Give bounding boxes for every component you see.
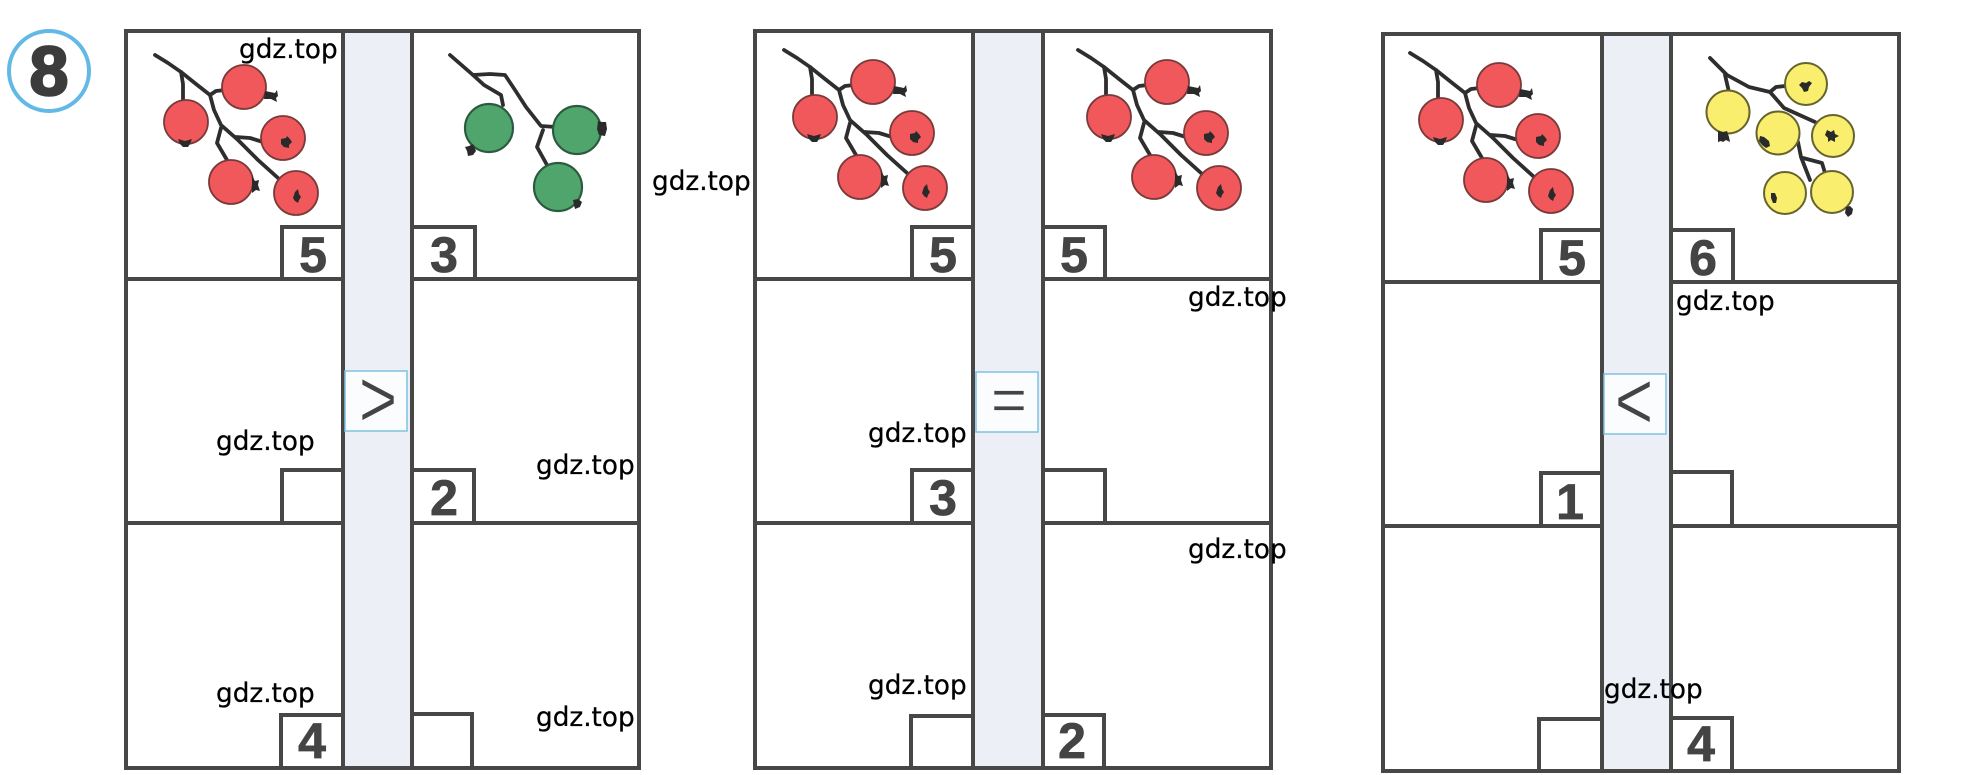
watermarks: gdz.top: gdz.top <box>1188 283 1287 313</box>
watermarks: gdz.top: gdz.top <box>1604 675 1703 705</box>
sign box: greater than <box>345 352 407 445</box>
sign box: greater than: > <box>359 352 397 445</box>
icon: red berries, 5 <box>1410 53 1573 213</box>
number boxes row 1 <box>282 227 475 283</box>
exercise number badge: 8: 8 <box>30 32 68 110</box>
watermarks: gdz.top: gdz.top <box>652 167 751 197</box>
number boxes row 2 <box>282 470 474 526</box>
panel 2 grid frame <box>755 31 1271 768</box>
sign box: less than: < <box>1615 354 1653 447</box>
watermarks: gdz.top: gdz.top <box>868 671 967 701</box>
number boxes row 1: 5 <box>299 227 327 283</box>
watermarks: gdz.top: gdz.top <box>1676 287 1775 317</box>
number boxes row 2: 1 <box>1556 474 1584 530</box>
number boxes row 3 <box>281 713 472 769</box>
number boxes row 2 <box>1541 472 1732 530</box>
watermarks: gdz.top: gdz.top <box>536 703 635 733</box>
panel: red 5 equals red 5 <box>755 31 1271 769</box>
panel 1 grid frame <box>126 31 639 768</box>
watermarks: gdz.top <box>216 35 1775 733</box>
watermarks: gdz.top: gdz.top <box>239 35 338 65</box>
number boxes row 3: 4 <box>298 713 326 769</box>
panel: red 5 greater than green 3 <box>126 31 639 769</box>
watermarks: gdz.top: gdz.top <box>536 451 635 481</box>
number boxes row 2: 3 <box>929 470 957 526</box>
number boxes row 1: 5 <box>1060 227 1088 283</box>
watermarks: gdz.top: gdz.top <box>1188 535 1287 565</box>
number boxes row 3: 2 <box>1058 713 1086 769</box>
number boxes row 1 <box>1541 230 1733 286</box>
sign box: equals: = <box>991 366 1027 435</box>
icon: green berries, 3 <box>450 55 607 211</box>
icon: red berries, 5 <box>155 55 318 215</box>
number boxes row 1: 6 <box>1689 230 1717 286</box>
number boxes row 2: 2 <box>430 470 458 526</box>
icon: red berries, left 5 <box>784 50 947 210</box>
number boxes row 1 <box>912 227 1105 283</box>
panel: red 5 less than yellow 6 <box>1383 34 1899 772</box>
watermarks: gdz.top: gdz.top <box>216 679 315 709</box>
watermarks: gdz.top: gdz.top <box>216 427 315 457</box>
icon: yellow berries, 6 <box>1706 58 1854 217</box>
number boxes row 3 <box>1539 716 1732 772</box>
icon: red berries, right 5 <box>1078 50 1241 210</box>
number boxes row 1: 5 <box>929 227 957 283</box>
sign box: equals <box>976 366 1038 435</box>
number boxes row 3 <box>911 713 1104 769</box>
number boxes row 1: 5 <box>1558 230 1586 286</box>
number boxes row 2 <box>912 470 1105 526</box>
watermarks: gdz.top: gdz.top <box>868 419 967 449</box>
exercise number badge: 8 <box>9 31 89 111</box>
number boxes row 1: 3 <box>430 227 458 283</box>
number boxes row 3: 4 <box>1687 716 1715 772</box>
sign box: less than <box>1604 354 1666 447</box>
panel 3 grid frame <box>1383 34 1899 771</box>
